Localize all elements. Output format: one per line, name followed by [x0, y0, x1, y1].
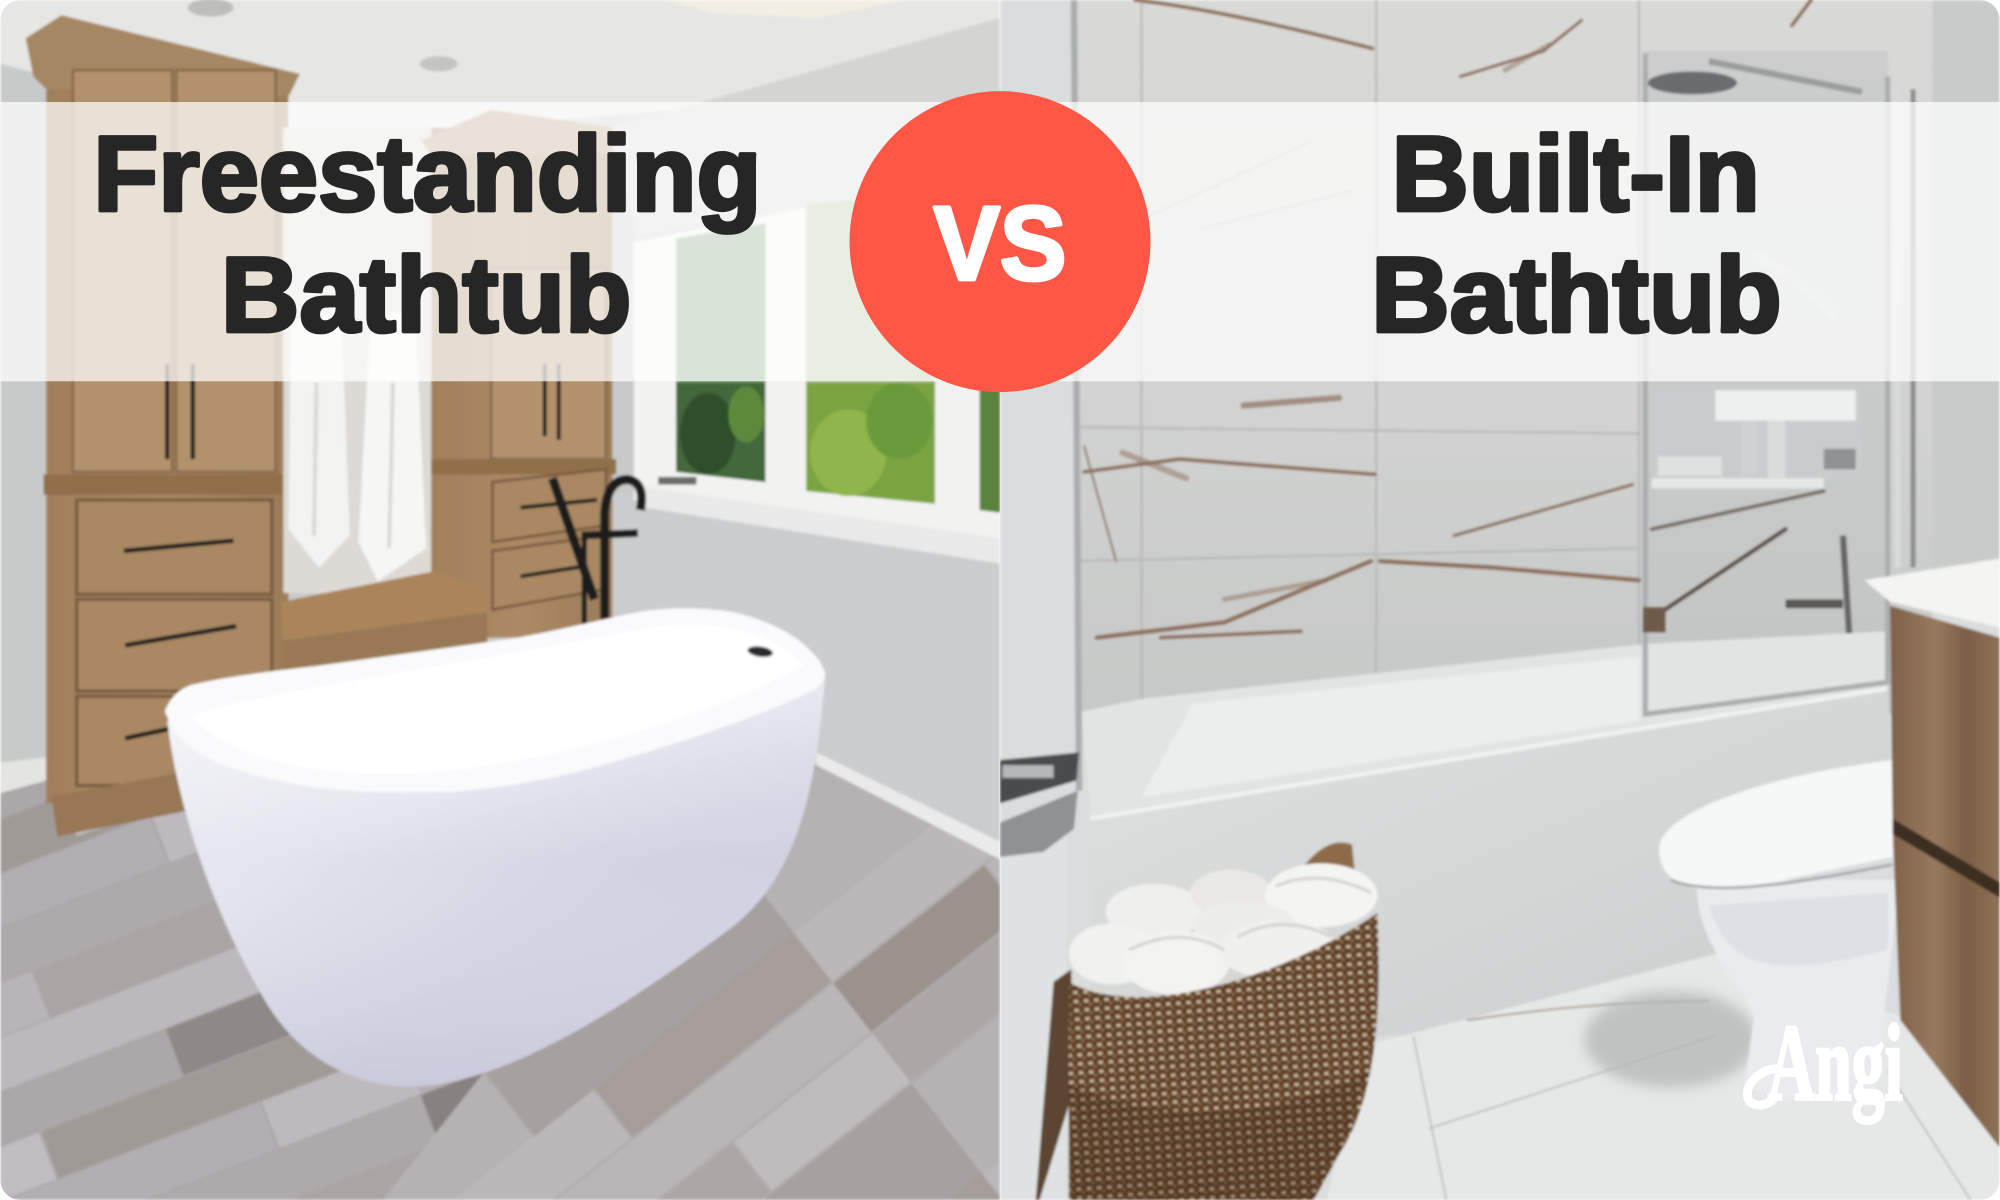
heading: built-in bathtub: Built-In: [1391, 113, 1760, 233]
door hinge: [1643, 607, 1666, 633]
right cabinet and bench: [281, 110, 616, 676]
countertop and wood vanity: [1865, 559, 2000, 1148]
side wall: [1000, 0, 2000, 1200]
heading: built-in bathtub: Bathtub: [1371, 235, 1782, 355]
alcove with towels: [283, 128, 434, 593]
panel: freestanding bathtub photo: [0, 0, 1000, 1200]
black tub faucet: [552, 478, 642, 625]
wood floor planks: [0, 780, 484, 1200]
glass shower door frame: [1074, 0, 1913, 791]
Angi logo: Angi: [1768, 1001, 1903, 1123]
left cabinet: [26, 15, 300, 837]
shower fittings: [1648, 61, 1862, 676]
heading: freestanding bathtub: [98, 131, 756, 334]
woven basket with towels: [1069, 842, 1379, 1200]
window with trees: [634, 168, 1000, 564]
VS badge: [850, 91, 1150, 392]
niche shelf: [1652, 389, 1862, 488]
VS badge: VS: [934, 185, 1066, 302]
toilet: [1659, 760, 1900, 1099]
bathtub deck and front: [1082, 631, 1890, 1035]
left vanity and sink: [1000, 752, 1079, 1200]
wall and ceiling: [0, 0, 1000, 893]
panel: built-in bathtub photo: [1000, 0, 2000, 1200]
freestanding white tub: [165, 608, 825, 1087]
translucent title band: [0, 102, 2000, 381]
baseboards: [0, 752, 1000, 860]
heading: freestanding bathtub: Freestanding: [93, 113, 762, 233]
floor tiles: [1326, 954, 2000, 1200]
heading: freestanding bathtub: Bathtub: [221, 235, 631, 355]
toilet shadow: [1584, 991, 1757, 1088]
right floor planks in perspective: [383, 765, 1000, 1200]
heading: built-in bathtub: [1376, 131, 1780, 334]
Angi logo: [1743, 1022, 1903, 1125]
marble tile wall: [1078, 0, 2000, 714]
